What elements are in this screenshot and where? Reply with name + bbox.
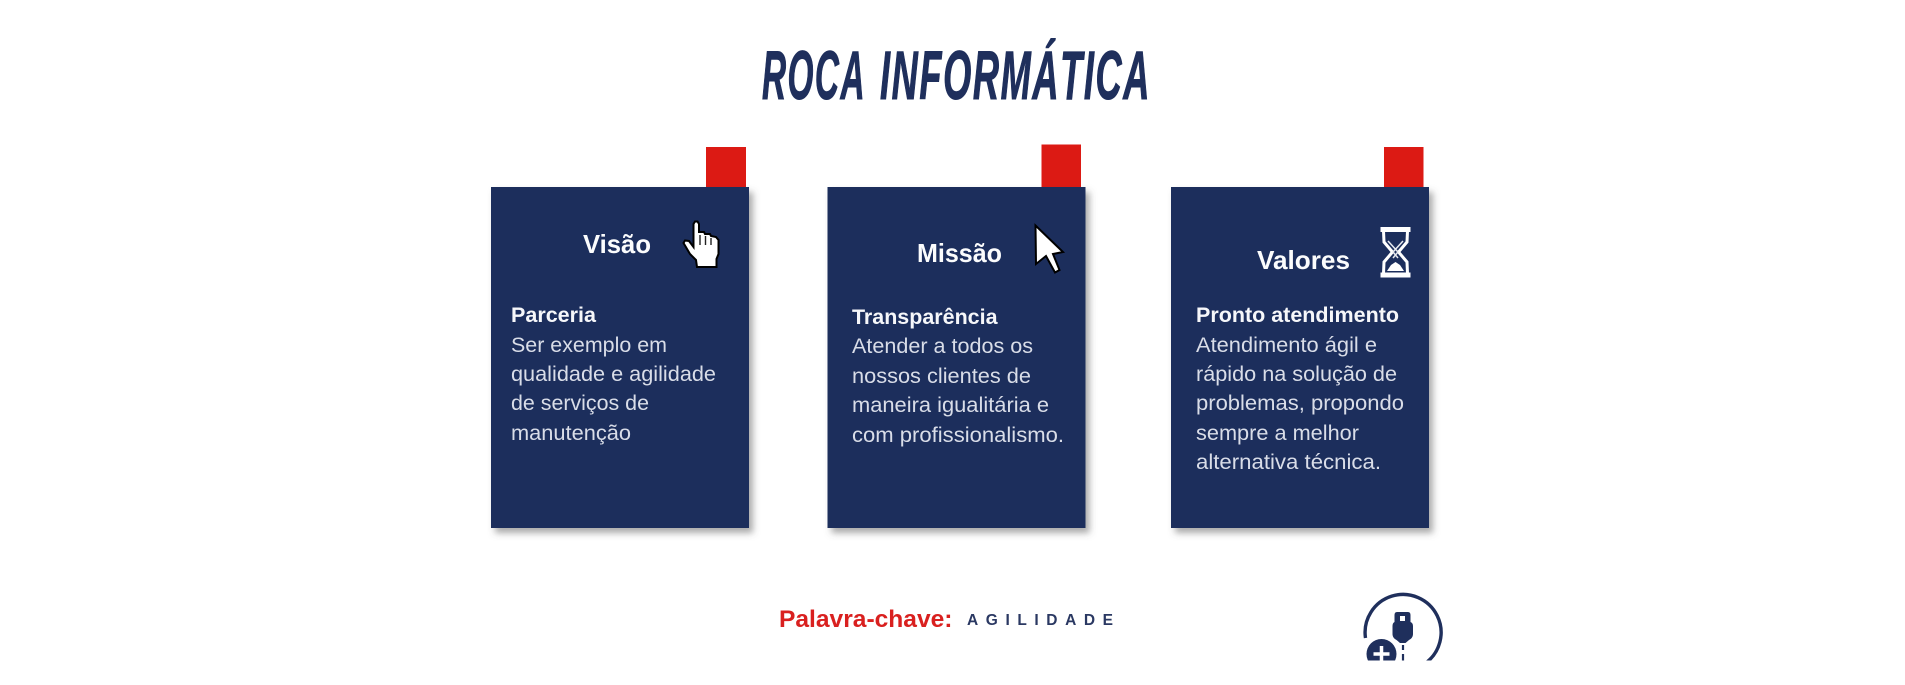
text block: Pronto atendimento: sempre a melhor (1196, 421, 1359, 445)
text block: Transparência: Transparência (852, 305, 999, 329)
text block: Parceria: manutenção (511, 421, 631, 445)
text block: Pronto atendimento: Pronto atendimento (1196, 303, 1399, 327)
text block: Pronto atendimento: alternativa técnica. (1196, 450, 1381, 474)
text block: Pronto atendimento: Atendimento ágil e (1196, 333, 1377, 357)
red tab: Valores (1384, 147, 1424, 188)
text block: Parceria (511, 303, 716, 445)
icon: arrow cursor (1036, 226, 1063, 272)
panel: Visão (491, 147, 749, 528)
panel: Valores (1171, 147, 1429, 528)
text block: Transparência: com profissionalismo. (852, 423, 1064, 447)
keyword value: AGILIDADE (967, 612, 1113, 629)
icon: hand cursor (684, 222, 718, 267)
title: INFORMÁTICA (880, 37, 1151, 114)
panel: Missão (828, 144, 1086, 528)
card: Missão (828, 187, 1086, 528)
text block: Parceria: Ser exemplo em (511, 333, 667, 357)
title: ROCA (762, 37, 866, 114)
text block: Pronto atendimento (1196, 303, 1404, 474)
keyword label: Palavra-chave: (779, 606, 952, 633)
heading: Valores: Valores (1257, 245, 1350, 275)
text block: Pronto atendimento: rápido na solução de (1196, 362, 1397, 386)
text block: Transparência: maneira igualitária e (852, 393, 1049, 417)
heading: Missão: Missão (917, 238, 1002, 268)
text block: Parceria: Parceria (511, 303, 597, 327)
text block: Parceria: de serviços de (511, 391, 649, 415)
text block: Transparência: nossos clientes de (852, 364, 1031, 388)
card: Valores (1171, 187, 1429, 528)
red tab: Missão (1042, 144, 1081, 188)
text block: Pronto atendimento: problemas, propondo (1196, 391, 1404, 415)
icon: USB lock (1365, 594, 1441, 669)
keyword line (779, 606, 1113, 633)
text block: Parceria: qualidade e agilidade (511, 362, 716, 386)
text block: Transparência: Atender a todos os (852, 334, 1033, 358)
heading: Visão: Visão (583, 229, 651, 259)
title (762, 37, 1151, 114)
text block: Transparência (852, 305, 1064, 447)
icon: hourglass (1380, 227, 1410, 278)
red tab: Visão (706, 147, 746, 188)
card: Visão (491, 187, 749, 528)
